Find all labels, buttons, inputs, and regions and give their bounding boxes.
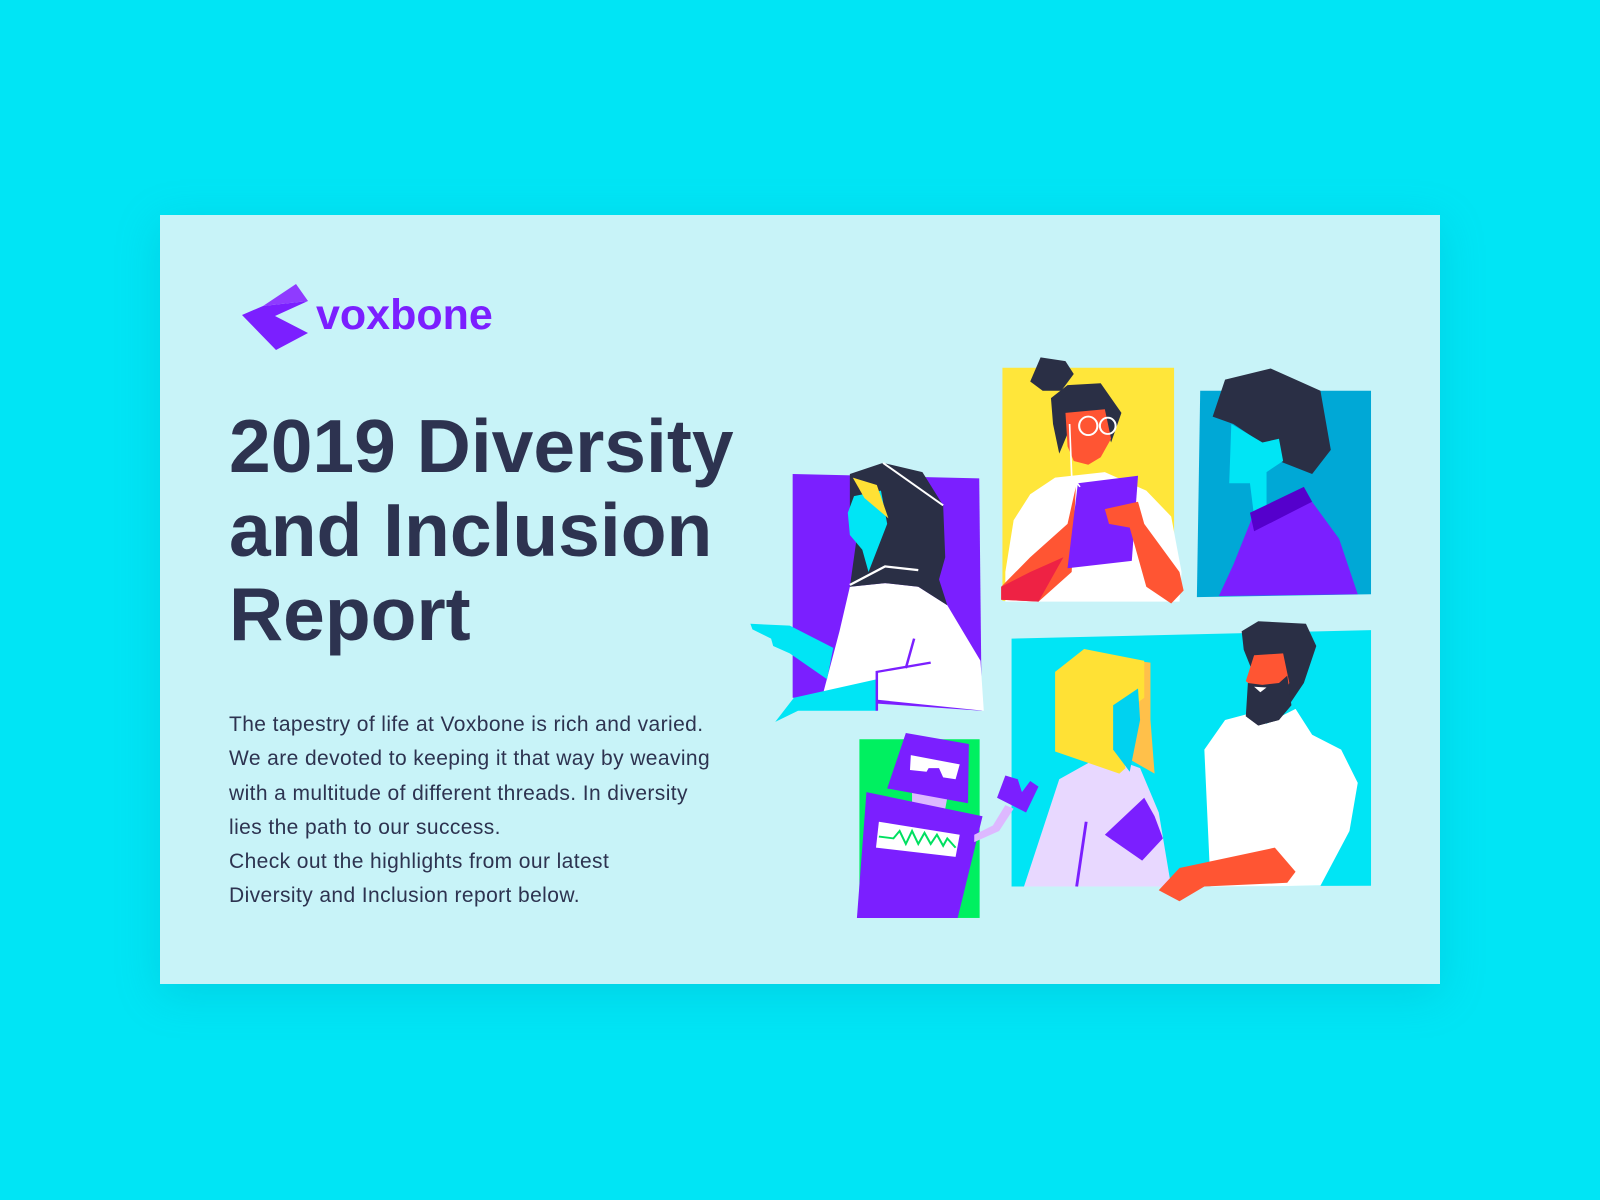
- panel: robot: [857, 733, 1039, 918]
- panel: card: [160, 215, 1440, 984]
- text block: intro: The tapestry of life at Voxbone is rich and varied.: [229, 713, 703, 736]
- logo: voxbone: [316, 291, 493, 339]
- title: [229, 404, 734, 656]
- logo: [242, 284, 493, 350]
- text block: intro: Diversity and Inclusion report below.: [229, 884, 580, 907]
- title: and Inclusion: [229, 488, 712, 572]
- title: Report: [229, 572, 471, 656]
- panel: woman with tablet: [1001, 357, 1184, 603]
- text block: intro: lies the path to our success.: [229, 816, 501, 839]
- panel: hijab woman: [750, 463, 984, 722]
- title: 2019 Diversity: [229, 404, 734, 488]
- text block: intro: with a multitude of different threads. In diversity: [229, 782, 688, 805]
- text block: intro: [229, 713, 710, 907]
- panel: man with curly hair: [1197, 368, 1371, 597]
- text block: intro: We are devoted to keeping it that way by weaving: [229, 747, 710, 770]
- panel: two colleagues: [1012, 621, 1371, 901]
- text block: intro: Check out the highlights from our latest: [229, 850, 609, 873]
